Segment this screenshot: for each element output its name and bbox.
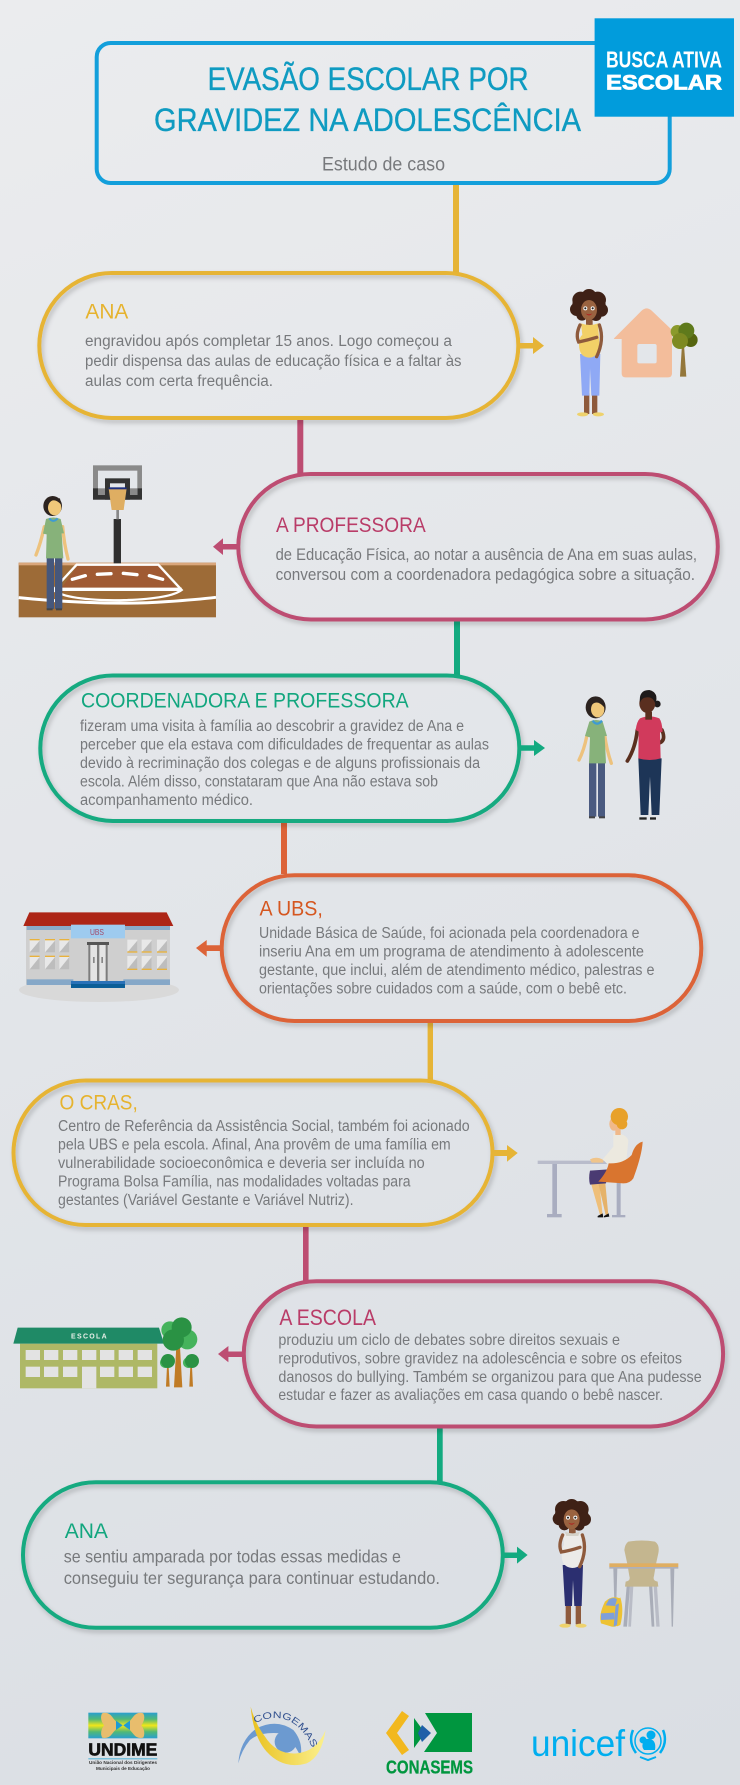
text block: Centro de Referência da Assistência Social, também foi acionado — [58, 1118, 470, 1135]
connector: CRAS to escola — [303, 1226, 309, 1282]
text block: perceber que ela estava com dificuldades de frequentar as aulas — [80, 736, 489, 753]
heading: ANA — [65, 1519, 109, 1543]
heading: A UBS, — [260, 896, 323, 920]
text block: conversou com a coordenadora pedagógica sobre a situação. — [276, 566, 695, 584]
arrow: escola — [218, 1346, 243, 1362]
heading: COORDENADORA E PROFESSORA — [81, 689, 409, 713]
title: EVASÃO ESCOLAR POR — [208, 61, 529, 97]
connector: title to Ana — [453, 184, 459, 274]
arrow: coordenadora — [521, 740, 545, 756]
text block: gestantes (Variável Gestante e Variável Nutriz). — [58, 1192, 354, 1209]
connector: UBS to CRAS — [428, 1022, 433, 1082]
heading: O CRAS, — [60, 1090, 138, 1114]
text block — [259, 925, 654, 998]
panel: Ana — [39, 273, 518, 418]
arrow: professora — [213, 538, 237, 555]
text block: de Educação Física, ao notar a ausência de Ana em suas aulas, — [276, 546, 697, 564]
text block: conseguiu ter segurança para continuar estudando. — [64, 1568, 440, 1588]
text block: vulnerabilidade socioeconômica e deveria ser incluída no — [58, 1155, 425, 1172]
panel: A escola — [244, 1281, 723, 1426]
text block: produziu um ciclo de debates sobre direitos sexuais e — [278, 1332, 620, 1349]
logo: CONGEMAS — [238, 1706, 326, 1766]
text block: pela UBS e pela escola. Afinal, Ana provêm de uma família em — [58, 1137, 451, 1154]
text block — [64, 1547, 440, 1588]
connector: coordenadora to UBS — [281, 822, 287, 874]
panel: title box — [97, 43, 670, 183]
arrow: CRAS — [494, 1145, 518, 1162]
text block: gestante, que inclui, além de atendimento médico, palestras e — [259, 962, 654, 979]
text block — [276, 546, 697, 584]
text block: devido à recriminação dos colegas e de alguns profissionais da — [80, 755, 480, 772]
text block: pedir dispensa das aulas de educação física e a faltar às — [85, 353, 462, 370]
text block — [58, 1118, 470, 1209]
panel: O CRAS — [14, 1080, 492, 1225]
subtitle: Estudo de caso — [322, 154, 445, 176]
icon: Ana with desk, chair and backpack — [553, 1499, 678, 1628]
text block — [80, 718, 489, 809]
heading: A PROFESSORA — [276, 513, 426, 537]
text block: escola. Além disso, constataram que Ana não estava sob — [80, 774, 438, 791]
logo: UNDIME — [88, 1713, 157, 1771]
panel: Ana final — [23, 1482, 503, 1628]
text block: estudar e fazer as avaliações em casa quando o bebê nascer. — [278, 1387, 663, 1404]
arrow: UBS — [196, 940, 220, 957]
connector: escola to Ana — [437, 1427, 443, 1483]
icon: school building and trees — [13, 1317, 199, 1388]
icon: teacher on basketball court — [19, 465, 216, 617]
panel: A UBS — [222, 875, 701, 1021]
icon: teacher and coordinator — [579, 690, 664, 820]
icon: woman seated at desk — [538, 1108, 643, 1217]
text block: reprodutivos, sobre gravidez na adolescência e sobre os efeitos — [278, 1350, 682, 1367]
text block: se sentiu amparada por todas essas medidas e — [64, 1547, 401, 1567]
text block: fizeram uma visita à família ao descobrir a gravidez de Ana e — [80, 718, 464, 735]
text block — [85, 333, 462, 390]
title — [154, 61, 582, 138]
icon: UBS health clinic building — [19, 912, 179, 1002]
logo: Busca Ativa Escolar — [595, 18, 734, 117]
text block: Programa Bolsa Família, nas modalidades voltadas para — [58, 1174, 411, 1191]
logo: UNDIME: UNDIME — [88, 1740, 157, 1760]
logo: UNDIME: Municipais de Educação — [96, 1766, 150, 1771]
arrow: Ana — [520, 337, 544, 354]
text block: inseriu Ana em um programa de atendimento à adolescente — [259, 944, 644, 961]
logo: CONASEMS — [386, 1711, 473, 1778]
panel: A professora — [238, 474, 718, 620]
icon: school building and trees: ESCOLA — [71, 1333, 107, 1340]
text block — [278, 1332, 702, 1404]
connector: Ana to professora — [297, 420, 303, 474]
heading: ANA — [85, 299, 129, 323]
text block: danosos do bullying. Também se organizou para que Ana pudesse — [278, 1369, 702, 1386]
panel: Coordenadora e professora — [40, 676, 519, 821]
text block: orientações sobre cuidados com a saúde, com o bebê etc. — [259, 981, 627, 998]
title: GRAVIDEZ NA ADOLESCÊNCIA — [154, 102, 582, 138]
text block: acompanhamento médico. — [80, 792, 253, 809]
connector: professora to coordenadora — [454, 621, 460, 676]
icon: UBS health clinic building: UBS — [90, 927, 104, 937]
logo: Busca Ativa Escolar: ESCOLAR — [606, 70, 723, 94]
icon: pregnant Ana with house and tree — [570, 289, 698, 416]
heading: A ESCOLA — [279, 1305, 376, 1330]
logo: unicef: unicef — [531, 1723, 626, 1764]
text block: engravidou após completar 15 anos. Logo começou a — [85, 333, 452, 350]
logo: CONGEMAS: CONGEMAS — [254, 1712, 317, 1747]
logo: CONASEMS: CONASEMS — [386, 1757, 473, 1778]
arrow: Ana final — [504, 1547, 528, 1564]
text block: Unidade Básica de Saúde, foi acionada pela coordenadora e — [259, 925, 640, 942]
logo: UNDIME: União Nacional dos Dirigentes — [89, 1760, 157, 1765]
text block: aulas com certa frequência. — [85, 373, 273, 390]
